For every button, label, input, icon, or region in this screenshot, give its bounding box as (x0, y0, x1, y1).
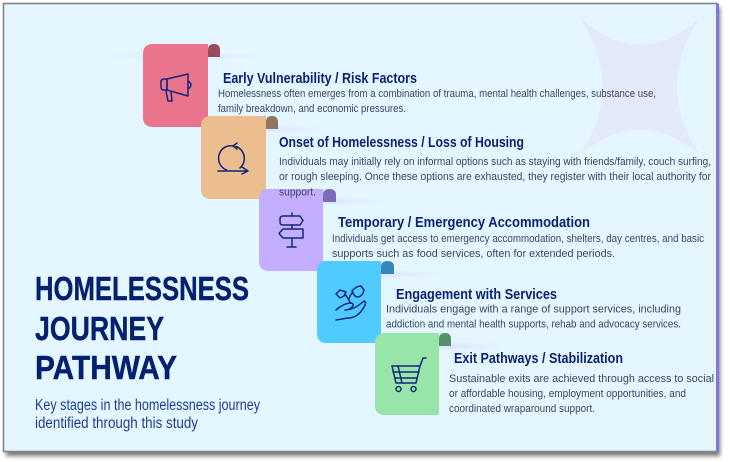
body 2 (279, 156, 711, 183)
title (35, 270, 249, 386)
body 5 (449, 373, 714, 415)
card 3 (259, 189, 336, 271)
title: PATHWAY (35, 349, 177, 386)
body 2 last line: support. (279, 186, 316, 198)
icon: hand with sprout (336, 286, 366, 320)
subtitle: identified through this study (35, 415, 198, 432)
body 4: Individuals engage with a range of support services, including (386, 304, 681, 316)
heading 4: Engagement with Services (396, 286, 557, 303)
body 1: Homelessness often emerges from a combination of trauma, mental health challenges, substance use, (218, 88, 656, 100)
step 2: onset (201, 116, 711, 199)
body 3: supports such as food services, often for extended periods. (332, 248, 615, 260)
body 4 (386, 304, 681, 330)
icon: megaphone (161, 74, 191, 101)
step 4: engagement (317, 261, 681, 343)
card 5 (375, 333, 451, 415)
step 3: temporary accommodation (259, 189, 704, 271)
heading 1: Early Vulnerability / Risk Factors (223, 70, 417, 87)
body 5: coordinated wraparound support. (449, 403, 595, 415)
heading 5: Exit Pathways / Stabilization (454, 350, 623, 367)
title: JOURNEY (35, 310, 164, 347)
heading 3: Temporary / Emergency Accommodation (338, 214, 590, 231)
body 4: addiction and mental health supports, rehab and advocacy services. (386, 318, 681, 330)
body 1: family breakdown, and economic pressures. (218, 103, 406, 115)
body 5: or affordable housing, employment opportunities, and (449, 388, 686, 400)
subtitle: Key stages in the homelessness journey (35, 397, 260, 414)
body 5: Sustainable exits are achieved through access to social (449, 373, 714, 385)
body 2: or rough sleeping. Once these options are exhausted, they register with their local authority for (279, 171, 711, 183)
icon: signpost (279, 213, 303, 247)
subtitle (35, 397, 260, 432)
decorative star shape (580, 18, 700, 155)
step 1: early vulnerability (143, 44, 656, 127)
body 3 (332, 233, 704, 260)
icon: shopping cart (392, 358, 426, 392)
card 2 (201, 116, 278, 199)
heading 2: Onset of Homelessness / Loss of Housing (279, 134, 524, 151)
title: HOMELESSNESS (35, 270, 249, 307)
body 1 (218, 88, 656, 115)
right edge accent (716, 4, 719, 452)
card 4 (317, 261, 394, 343)
step 5: exit pathways (375, 333, 714, 415)
icon: loop (218, 143, 248, 174)
card 1 (143, 44, 220, 127)
